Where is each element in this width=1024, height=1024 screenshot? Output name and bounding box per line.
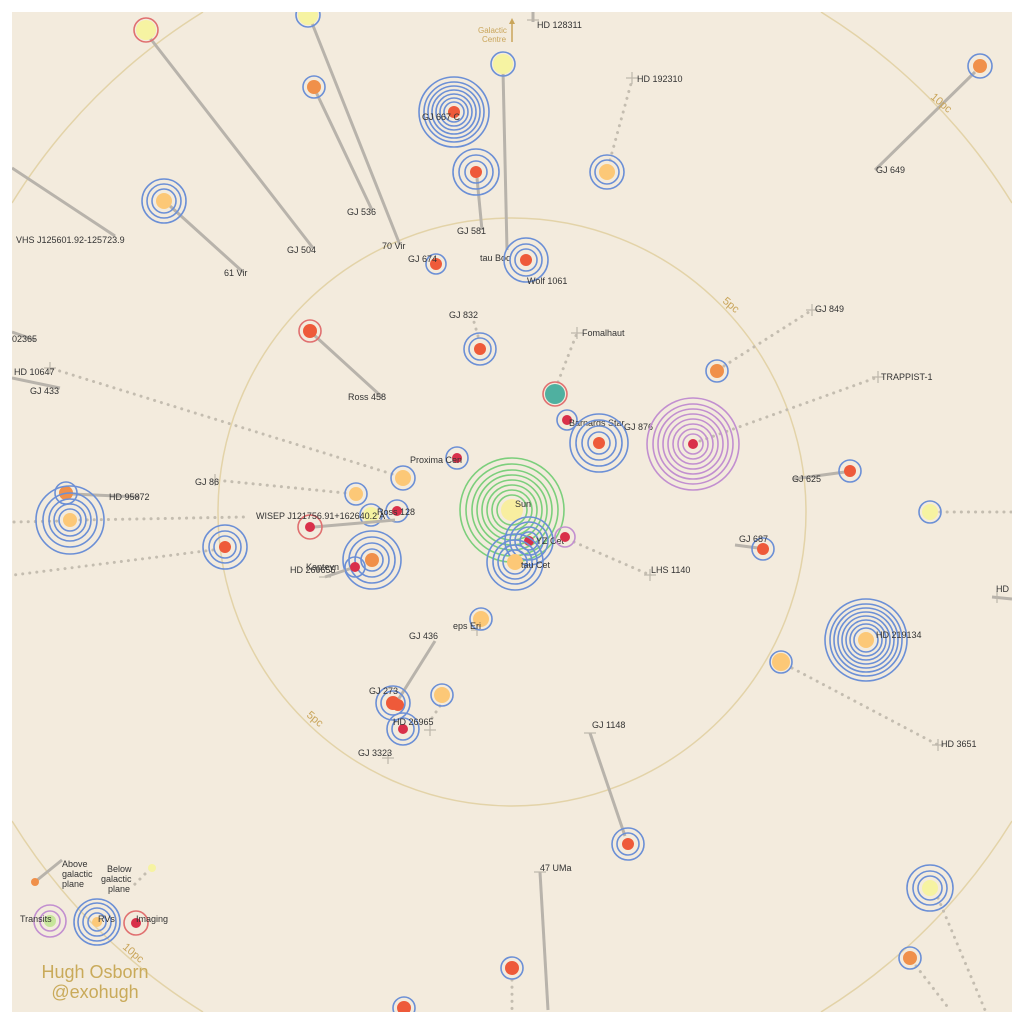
distance labels [120, 91, 954, 966]
system: HD 26965: HD 26965 [393, 717, 434, 727]
legend: above plane [31, 859, 93, 889]
system: Sun [460, 458, 564, 562]
legend: imaging: Imaging [136, 914, 168, 924]
distance labels: 5pc [304, 709, 326, 730]
legend: above plane: Above [62, 859, 88, 869]
distance labels: 5pc [720, 295, 742, 316]
system: VHS J125601.92-125723.9 [12, 168, 125, 245]
system: Ross 128: Ross 128 [377, 507, 415, 517]
system: GJ 433: GJ 433 [30, 386, 59, 396]
system: right edge star [919, 501, 1012, 523]
system: HD 128311: HD 128311 [537, 20, 582, 30]
system: Fomalhaut: Fomalhaut [582, 328, 625, 338]
credit [41, 962, 149, 1002]
system: Wolf 1061 [504, 238, 567, 286]
system: HD 26965 [387, 713, 436, 745]
system: HD 219134 [825, 599, 922, 681]
system: GJ 1148: GJ 1148 [592, 720, 625, 730]
system: Proxima Cen [410, 447, 468, 469]
system: HD 219134: HD 219134 [876, 630, 922, 640]
system: GJ 1148 [584, 720, 644, 860]
system: tau Boo [480, 52, 515, 263]
system: Proxima Cen: Proxima Cen [410, 455, 462, 465]
system: 61 Vir: 61 Vir [224, 268, 247, 278]
system: left star [14, 525, 247, 575]
system: HD edge: HD [996, 584, 1009, 594]
system: 70 Vir: 70 Vir [382, 241, 405, 251]
system: GJ 687: GJ 687 [739, 534, 768, 544]
system: WISEP J121756.91+162640.2 A [256, 511, 395, 539]
legend: below plane [101, 864, 156, 894]
system: GJ 876: GJ 876 [624, 422, 653, 432]
system: tau Boo: tau Boo [480, 253, 511, 263]
system: GJ 667 C: GJ 667 C [422, 112, 461, 122]
system: YZ Cet: YZ Cet [536, 536, 565, 546]
system: HD 192310: HD 192310 [637, 74, 683, 84]
system: GJ 849 [706, 304, 844, 382]
system: GJ 849: GJ 849 [815, 304, 844, 314]
legend: transits [20, 905, 66, 937]
system: HD 95872 [55, 482, 150, 504]
system: Kapteyn [306, 531, 401, 589]
system: star near GJ 273 [431, 684, 453, 718]
system: Ross 458 [299, 320, 386, 402]
system: HD 128311 [527, 12, 582, 30]
system: eps Eri: eps Eri [453, 621, 481, 631]
system: GJ 436 [398, 631, 438, 700]
system: GJ 504: GJ 504 [287, 245, 316, 255]
system: Fomalhaut [543, 327, 625, 406]
system: GJ 536 [303, 76, 376, 217]
system: GJ 86: GJ 86 [195, 477, 219, 487]
system: HD edge [992, 584, 1012, 603]
system: GJ 581: GJ 581 [457, 226, 486, 236]
legend: imaging [124, 911, 168, 935]
legend: below plane: plane [108, 884, 130, 894]
system: HD 192310 [590, 72, 683, 189]
system: GJ 625 [792, 460, 861, 484]
credit: @exohugh [51, 982, 139, 1002]
system: 47 UMa: 47 UMa [540, 863, 572, 873]
system: TRAPPIST-1 [647, 371, 933, 490]
system: Barnards Star [557, 410, 625, 430]
system: Ross 458: Ross 458 [348, 392, 386, 402]
system: HD 260655 [290, 557, 365, 577]
system: GJ 832 [449, 310, 496, 365]
system: GJ 649: GJ 649 [876, 165, 905, 175]
system: GJ 687 [735, 534, 774, 560]
legend: below plane: galactic [101, 874, 132, 884]
system: GJ 3323 [358, 748, 394, 764]
system: HD 10647: HD 10647 [14, 367, 55, 377]
system: LHS 1140 [555, 527, 690, 581]
system: LHS 1140: LHS 1140 [651, 565, 690, 575]
system: GJ 667 C [419, 77, 489, 147]
system: GJ 876 [570, 414, 653, 472]
legend: RVs: RVs [98, 914, 115, 924]
system: lower right star [907, 865, 985, 1010]
system: 70 Vir [296, 3, 405, 251]
system: GJ 832: GJ 832 [449, 310, 478, 320]
system: VHS J125601.92-125723.9: VHS J125601.92-125723.9 [16, 235, 125, 245]
system: HD 3651: HD 3651 [941, 739, 977, 749]
system: WISEP J121756.91+162640.2 A: WISEP J121756.91+162640.2 A [256, 511, 385, 521]
distance labels: 10pc [120, 941, 146, 966]
system: GJ 436: GJ 436 [409, 631, 438, 641]
legend: RVs [74, 899, 120, 945]
system: bottom edge star [392, 996, 416, 1012]
credit: Hugh Osborn [41, 962, 149, 982]
system: YZ Cet [505, 517, 565, 565]
system: GJ 536: GJ 536 [347, 207, 376, 217]
system: Barnards Star: Barnards Star [569, 418, 625, 428]
legend: transits: Transits [20, 914, 52, 924]
system: GJ 86 [195, 474, 367, 505]
label: galactic centre arrow: Galactic [478, 26, 507, 35]
system: lower right star 2 [899, 947, 950, 1010]
system: 47 UMa [534, 863, 572, 1010]
label: galactic centre arrow [478, 18, 515, 44]
system: GJ 433 [12, 378, 60, 396]
system: GJ 504 [134, 18, 316, 255]
label: galactic centre arrow: Centre [482, 35, 507, 44]
system: GJ 581 [453, 149, 499, 236]
system: GJ 674: GJ 674 [408, 254, 437, 264]
system: GJ 674 [408, 254, 446, 274]
system: 61 Vir [142, 179, 247, 278]
system: tau Cet [487, 534, 551, 590]
system: GJ 3323: GJ 3323 [358, 748, 392, 758]
system: TRAPPIST-1: TRAPPIST-1 [881, 372, 933, 382]
system: HD 10647 [14, 362, 415, 490]
system: GJ 649 [875, 54, 992, 175]
system: HD 260655: HD 260655 [290, 565, 336, 575]
system: eps Eri [453, 608, 492, 636]
system: left edge multi-planet [14, 486, 245, 554]
system: GJ 625: GJ 625 [792, 474, 821, 484]
distance labels: 10pc [928, 91, 954, 116]
system: Sun: Sun [515, 499, 531, 509]
system: GJ 273 [369, 686, 410, 720]
system: 02365: 02365 [12, 334, 37, 344]
system: HD 3651 [770, 651, 977, 751]
system: bottom star [501, 957, 523, 1010]
system: Kapteyn: Kapteyn [306, 562, 339, 572]
system: HD 95872: HD 95872 [109, 492, 150, 502]
system: Wolf 1061: Wolf 1061 [527, 276, 567, 286]
legend [20, 859, 168, 945]
system: GJ 273: GJ 273 [369, 686, 398, 696]
system: tau Cet: tau Cet [521, 560, 551, 570]
legend: above plane: plane [62, 879, 84, 889]
legend: below plane: Below [107, 864, 132, 874]
legend: above plane: galactic [62, 869, 93, 879]
system: Ross 128 [360, 500, 415, 526]
